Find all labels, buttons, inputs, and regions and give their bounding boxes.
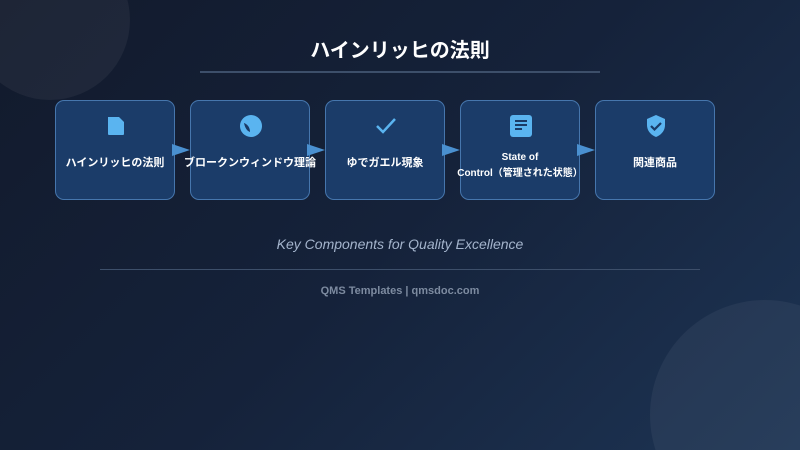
- step 2: [190, 100, 310, 200]
- step 5: [595, 100, 715, 200]
- step 1: ハインリッヒの法則: [66, 157, 164, 169]
- arrow 3: [442, 144, 460, 156]
- icon: document: [108, 117, 124, 135]
- icon: shield: [647, 115, 665, 137]
- arrow 4: [577, 144, 595, 156]
- step 4: [460, 100, 580, 200]
- step 4: State of: [502, 152, 538, 163]
- step 4: Control（管理された状態）: [457, 168, 583, 179]
- icon: list: [510, 115, 532, 137]
- step 5: 関連商品: [633, 157, 677, 169]
- icon: check: [376, 118, 396, 134]
- step 3: ゆでガエル現象: [346, 157, 424, 169]
- title: ハインリッヒの法則: [310, 40, 490, 62]
- footer: QMS Templates | qmsdoc.com: [321, 285, 479, 297]
- subtitle: Key Components for Quality Excellence: [277, 236, 523, 252]
- step 1: [55, 100, 175, 200]
- icon: circle: [240, 115, 262, 137]
- arrow 2: [307, 144, 325, 156]
- step 3: [325, 100, 445, 200]
- step 2: ブロークンウィンドウ理論: [184, 157, 316, 169]
- arrow 1: [172, 144, 190, 156]
